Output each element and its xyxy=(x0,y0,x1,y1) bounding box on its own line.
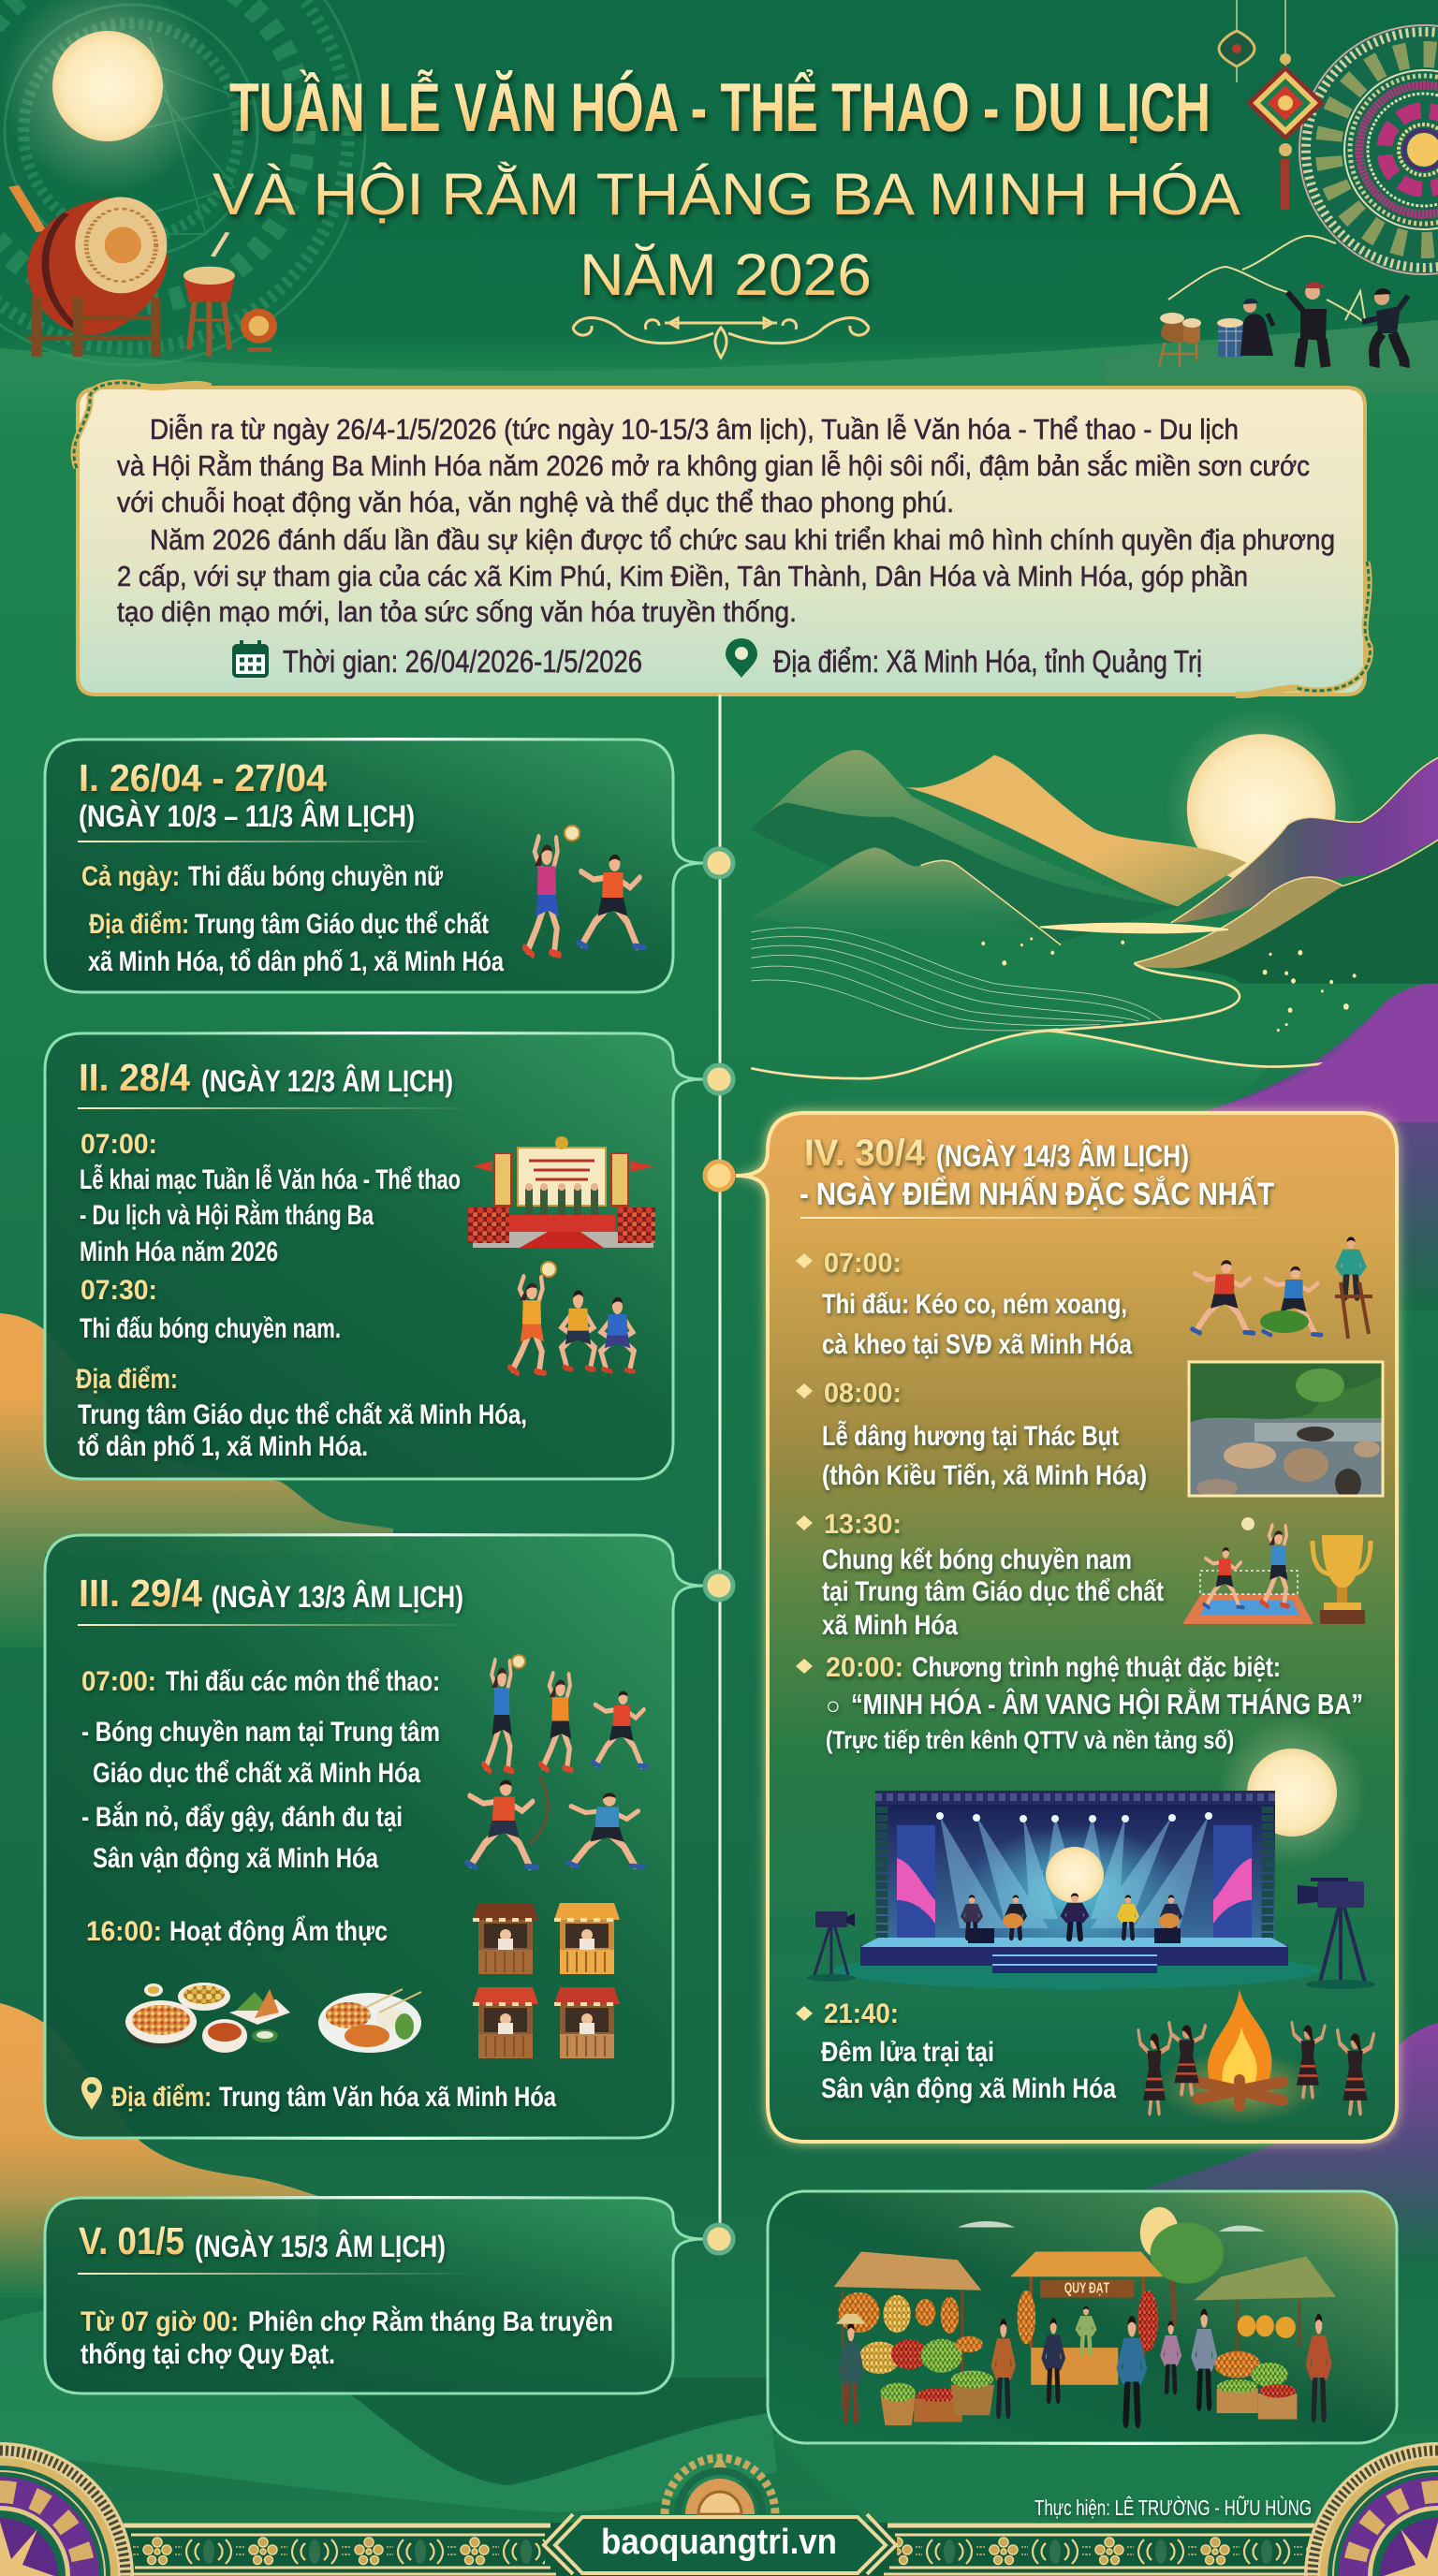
node IV xyxy=(705,1162,733,1190)
illustration: campfire with dancers xyxy=(1138,1989,1373,2125)
bronze drum pattern: top right xyxy=(1299,25,1438,274)
illustration: sports players xyxy=(467,1655,648,1867)
heading: III. 29/4 xyxy=(79,1572,202,1615)
bronze drum corner: left xyxy=(0,2442,134,2576)
illustration: men's volleyball xyxy=(509,1262,634,1373)
intro text: 2 cấp, với sự tham gia của các xã Kim Phú, Kim Điền, Tân Thành, Dân Hóa và Minh Hóa, góp phần xyxy=(117,560,1248,593)
panel: IV 30/4 highlight: Đêm lửa trại tại xyxy=(821,2037,994,2068)
panel: III 29/4 xyxy=(45,1533,704,2140)
icon: location pin xyxy=(81,2077,102,2110)
heading: IV. 30/4 xyxy=(804,1133,926,1174)
highlight line: - NGÀY ĐIỂM NHẤN ĐẶC SẮC NHẤT xyxy=(800,1177,1274,1212)
08:00 item: 08:00: xyxy=(824,1378,902,1409)
icon: calendar xyxy=(234,640,267,676)
illustration: food dishes xyxy=(125,1983,421,2053)
intro text: tạo diện mạo mới, lan tỏa sức sống văn hóa truyền thống. xyxy=(117,595,797,628)
panel: II 28/4 xyxy=(45,1032,704,1479)
panel: V 01/5 xyxy=(45,2196,704,2393)
panel: II 28/4: Trung tâm Giáo dục thể chất xã Minh Hóa, xyxy=(78,1399,527,1430)
panel: IV 30/4 highlight: Chung kết bóng chuyền nam xyxy=(822,1544,1132,1575)
lunar date: (NGÀY 13/3 ÂM LỊCH) xyxy=(212,1580,463,1614)
moon: top left xyxy=(0,0,215,194)
photo: Thác Bụt stream xyxy=(1189,1362,1383,1499)
credits: Thực hiện: LÊ TRƯỜNG - HỮU HÙNG xyxy=(1034,2495,1312,2520)
decorative mandala above footer xyxy=(665,2454,775,2514)
intro text: với chuỗi hoạt động văn hóa, văn nghệ và thể dục thể thao phong phú. xyxy=(117,486,954,519)
intro text xyxy=(117,413,1335,628)
panel: II 28/4: - Du lịch và Hội Rằm tháng Ba xyxy=(80,1199,374,1231)
panel: III 29/4: Thi đấu các môn thể thao: xyxy=(166,1666,440,1697)
illustration: food stalls xyxy=(473,1903,620,2058)
website badge xyxy=(544,2514,896,2574)
intro text: và Hội Rằm tháng Ba Minh Hóa năm 2026 mở ra không gian lễ hội sôi nổi, đậm bản sắc miền sơn cước xyxy=(117,449,1310,482)
icon: hanging lantern ornament xyxy=(1219,0,1325,210)
panel: I 26/04 - 27/04: Trung tâm Giáo dục thể chất xyxy=(195,909,489,940)
panel: market illustration xyxy=(768,2191,1397,2445)
20:00 item: 20:00: xyxy=(826,1652,903,1683)
07:00 item: 07:00: xyxy=(81,1129,157,1160)
07:00 item: 07:00: xyxy=(81,1666,156,1697)
heading: V. 01/5 xyxy=(79,2219,184,2262)
panel: III 29/4: Trung tâm Văn hóa xã Minh Hóa xyxy=(219,2082,556,2113)
icon: left camera xyxy=(807,1911,856,1982)
panel: I 26/04 - 27/04: Thi đấu bóng chuyền nữ xyxy=(188,861,443,892)
intro text: Diễn ra từ ngày 26/4-1/5/2026 (tức ngày 10-15/3 âm lịch), Tuần lễ Văn hóa - Thể thao - Du lịch xyxy=(150,413,1239,446)
title xyxy=(213,70,1240,308)
timeline nodes xyxy=(705,849,733,2253)
panel: IV 30/4 highlight: cà kheo tại SVĐ xã Minh Hóa xyxy=(822,1329,1132,1360)
heading: II. 28/4 xyxy=(79,1056,190,1099)
icon: bullet diamonds xyxy=(796,1253,813,2021)
illustration: music stage with moon xyxy=(833,1718,1367,1989)
programme name: ○ xyxy=(826,1691,841,1720)
title line 2: VÀ HỘI RẰM THÁNG BA MINH HÓA xyxy=(213,161,1240,227)
website text: baoquangtri.vn xyxy=(601,2523,837,2562)
bronze drum pattern: top left xyxy=(0,0,365,365)
panel: II 28/4: Minh Hóa năm 2026 xyxy=(80,1237,278,1267)
07:00 item: 07:00: xyxy=(824,1248,902,1279)
location label: Địa điểm: xyxy=(89,909,189,940)
panel: IV 30/4 highlight: Lễ dâng hương tại Thác Bụt xyxy=(822,1420,1119,1452)
panel: III 29/4: - Bắn nỏ, đẩy gậy, đánh đu tại xyxy=(81,1801,403,1833)
panel: III 29/4: Hoạt động Ẩm thực xyxy=(169,1915,388,1947)
illustration: festival drums xyxy=(14,186,277,357)
13:30 item: 13:30: xyxy=(824,1509,902,1540)
panel: IV 30/4 highlight xyxy=(736,1113,1397,2142)
market sign: QUY ĐẠT xyxy=(1064,2280,1110,2296)
schedule: Từ 07 giờ 00: xyxy=(81,2306,239,2337)
panel: IV 30/4 highlight: Sân vận động xã Minh Hóa xyxy=(821,2073,1116,2104)
panel: I 26/04 - 27/04: xã Minh Hóa, tổ dân phố 1, xã Minh Hóa xyxy=(88,946,504,977)
illustration: women's volleyball xyxy=(524,826,644,955)
panel: II 28/4: Thi đấu bóng chuyền nam. xyxy=(80,1313,341,1344)
panel: IV 30/4 highlight: xã Minh Hóa xyxy=(822,1610,958,1641)
lunar date: (NGÀY 10/3 – 11/3 ÂM LỊCH) xyxy=(79,799,415,833)
heading: I. 26/04 - 27/04 xyxy=(79,756,327,799)
panel: IV 30/4 highlight: Chương trình nghệ thuật đặc biệt: xyxy=(912,1652,1281,1683)
location: Địa điểm: xyxy=(111,2082,212,2113)
node V xyxy=(705,2225,733,2253)
node I xyxy=(705,849,733,877)
panel: II 28/4: Lễ khai mạc Tuần lễ Văn hóa - Thể thao xyxy=(80,1164,461,1195)
bronze drum corner: right xyxy=(1304,2442,1438,2576)
panel: III 29/4: Giáo dục thể chất xã Minh Hóa xyxy=(93,1758,420,1789)
07:30 item: 07:30: xyxy=(81,1275,157,1306)
schedule: Cả ngày: xyxy=(81,861,180,892)
lunar date: (NGÀY 12/3 ÂM LỊCH) xyxy=(201,1064,453,1098)
illustration: tug of war and stilts xyxy=(1192,1237,1372,1339)
illustration: volleyball final and trophy xyxy=(1182,1517,1371,1624)
panel: II 28/4: tổ dân phố 1, xã Minh Hóa. xyxy=(78,1431,368,1462)
lunar date: (NGÀY 15/3 ÂM LỊCH) xyxy=(195,2230,446,2263)
node III xyxy=(705,1572,733,1600)
footer ornament band xyxy=(124,2523,1314,2576)
time text: Thời gian: 26/04/2026-1/5/2026 xyxy=(283,644,642,679)
illustration: moonlit mountains xyxy=(751,709,1438,1122)
16:00 item: 16:00: xyxy=(86,1916,162,1947)
lunar date: (NGÀY 14/3 ÂM LỊCH) xyxy=(936,1139,1189,1173)
node II xyxy=(705,1065,733,1093)
panel: IV 30/4 highlight: (thôn Kiều Tiến, xã Minh Hóa) xyxy=(822,1460,1147,1491)
panel: IV 30/4 highlight: Thi đấu: Kéo co, ném xoang, xyxy=(822,1289,1127,1320)
21:40 item: 21:40: xyxy=(824,1998,899,2029)
intro text: Năm 2026 đánh dấu lần đầu sự kiện được tổ chức sau khi triển khai mô hình chính quyền địa phương xyxy=(150,523,1335,556)
panel: V 01/5: Phiên chợ Rằm tháng Ba truyền xyxy=(248,2305,613,2337)
timeline line xyxy=(719,695,721,2239)
title flourish xyxy=(573,318,869,358)
icon: location pin xyxy=(726,638,757,678)
panel: III 29/4: - Bóng chuyền nam tại Trung tâm xyxy=(81,1717,440,1748)
location: Địa điểm: xyxy=(76,1364,178,1395)
icon: right camera xyxy=(1298,1880,1376,1989)
panel: III 29/4: Sân vận động xã Minh Hóa xyxy=(93,1843,378,1874)
title line 3: NĂM 2026 xyxy=(580,242,872,308)
illustration: hills and folk musicians xyxy=(1105,236,1438,393)
panel: intro xyxy=(74,383,1370,695)
place text: Địa điểm: Xã Minh Hóa, tỉnh Quảng Trị xyxy=(773,644,1202,679)
panel: IV 30/4 highlight: (Trực tiếp trên kênh QTTV và nền tảng số) xyxy=(826,1726,1234,1754)
panel: I 26/04 - 27/04 xyxy=(45,738,704,992)
illustration: Quy Đạt market xyxy=(833,2207,1336,2425)
panel: V 01/5: thống tại chợ Quy Đạt. xyxy=(81,2339,335,2370)
panel: IV 30/4 highlight: tại Trung tâm Giáo dục thể chất xyxy=(822,1576,1164,1607)
illustration: opening ceremony stage xyxy=(468,1136,655,1248)
